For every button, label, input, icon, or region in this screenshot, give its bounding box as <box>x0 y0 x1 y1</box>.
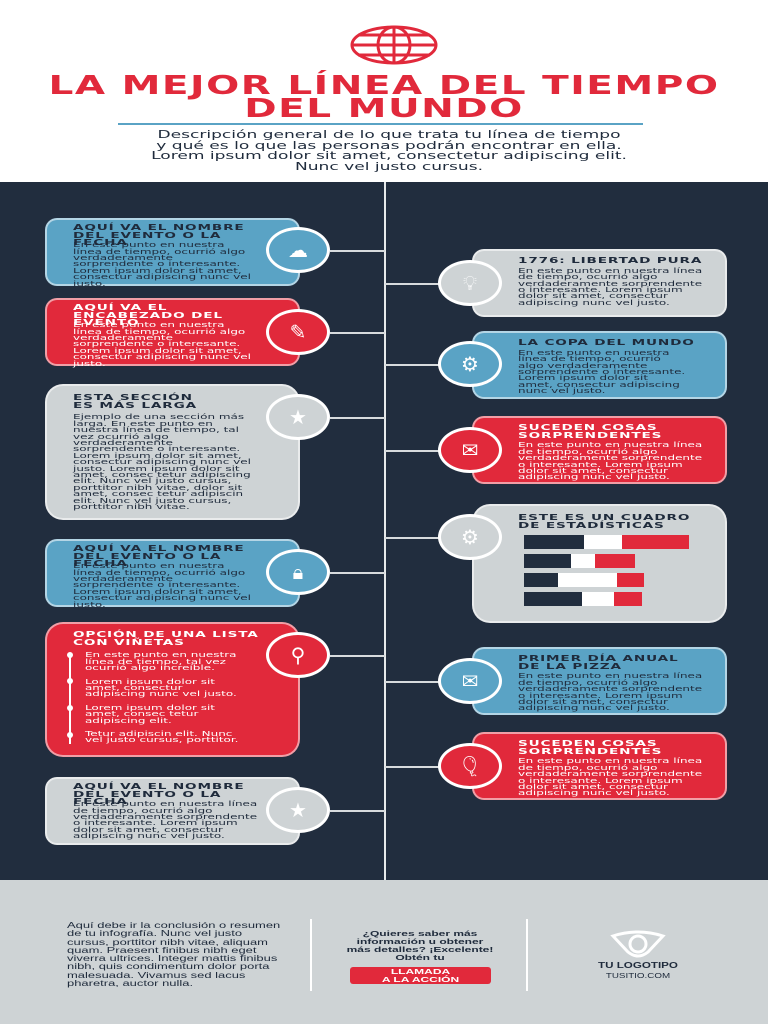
event left 3: verdaderamente <box>73 439 173 447</box>
event left 5: list: Lorem ipsum dolor sit <box>85 704 215 712</box>
event right 1: dolor sit amet, consectur <box>518 292 668 300</box>
event left 3: Lorem ipsum dolor sit amet, <box>73 452 242 460</box>
event left 6: En este punto en nuestra línea <box>73 800 257 808</box>
event left 5: list: CON VIÑETAS <box>73 638 185 647</box>
event left 5: list: adipiscing nunc vel justo. <box>85 690 237 698</box>
event left 4: FECHA <box>73 559 128 568</box>
event left 5: list: En este punto en nuestra <box>85 651 236 659</box>
event right 3: En este punto en nuestra línea <box>518 441 702 449</box>
title <box>48 70 719 124</box>
event left 1: DEL EVENTO O LA <box>73 231 221 240</box>
event right 1: verdaderamente sorprendente <box>518 280 702 288</box>
event left 3: elit. Nunc vel justo cursus, <box>73 477 231 485</box>
event left 3 <box>45 384 300 520</box>
icon: mail 2 <box>438 658 502 704</box>
conclusion text: nibh, quis condimentum dolor porta <box>67 962 269 971</box>
icon: gear: ⚙ <box>461 352 479 376</box>
event left 5: list: adipiscing elit. <box>85 717 172 725</box>
event right 3: SUCEDEN COSAS <box>518 423 658 432</box>
event left 2 <box>45 298 300 366</box>
event right 5: adipiscing nunc vel justo. <box>518 704 670 712</box>
event left 3: vez ocurrió algo <box>73 433 169 441</box>
event left 6: verdaderamente sorprendente <box>73 813 257 821</box>
conclusion text: viverra ultrices. Integer mattis finibus <box>67 954 277 963</box>
event left 1: Lorem ipsum dolor sit amet, <box>73 267 242 275</box>
event left 2: Lorem ipsum dolor sit amet, <box>73 347 242 355</box>
event right 6: adipiscing nunc vel justo. <box>518 789 670 797</box>
event left 3: consectur adipiscing nunc vel <box>73 458 251 466</box>
event right 2: En este punto en nuestra <box>518 349 669 357</box>
event left 2: ENCABEZADO DEL <box>73 311 223 320</box>
panel: timeline <box>0 182 768 880</box>
icon: balloon: 🎈︎ <box>457 754 483 778</box>
event right 2: línea de tiempo, ocurrió <box>518 355 661 363</box>
description: Descripción general de lo que trata tu línea de tiempo <box>157 128 621 141</box>
icon: star <box>266 394 330 440</box>
icon: balloon <box>438 743 502 789</box>
event left 1: consectur adipiscing nunc vel <box>73 273 251 281</box>
event left 1 <box>45 218 300 286</box>
call to action <box>347 929 493 984</box>
event right 5: PRIMER DÍA ANUAL <box>518 654 678 663</box>
conclusion text: malesuada. Vivamus sed lacus <box>67 971 245 980</box>
event right 1: adipiscing nunc vel justo. <box>518 299 670 307</box>
event left 5: list: amet, consec tetur <box>85 710 198 718</box>
event right 3: o interesante. Lorem ipsum <box>518 461 683 469</box>
event left 3: sorprendente o interesante. <box>73 445 240 453</box>
event right 5: verdaderamente sorprendente <box>518 685 702 693</box>
event right 5 <box>472 647 727 715</box>
conclusion text: de tu infografía. Nunc vel justo <box>67 929 242 938</box>
event left 6: DEL EVENTO O LA <box>73 790 221 799</box>
icon: bulb <box>438 260 502 306</box>
event left 4: AQUÍ VA EL NOMBRE <box>73 544 245 553</box>
event left 1: sorprendente o interesante. <box>73 260 240 268</box>
conclusion text <box>67 921 280 988</box>
event left 5: list: OPCIÓN DE UNA LISTA <box>73 630 259 639</box>
event right 6: de tiempo, ocurrió algo <box>518 764 658 772</box>
icon: dropper <box>266 309 330 355</box>
conclusion text: cursus, porttitor nibh vitae, aliquam <box>67 938 268 947</box>
title: DEL MUNDO <box>244 94 524 124</box>
logo: TU LOGOTIPO <box>598 961 678 970</box>
event left 2: verdaderamente <box>73 334 173 342</box>
event left 4: verdaderamente <box>73 575 173 583</box>
icon: pin: ⚲ <box>291 643 305 667</box>
icon: pin <box>266 632 330 678</box>
event left 5: list: Tetur adipiscin elit. Nunc <box>85 730 232 738</box>
event right 5: En este punto en nuestra línea <box>518 672 702 680</box>
icon: bag <box>266 549 330 595</box>
event left 4: En este punto en nuestra <box>73 562 224 570</box>
icon: globe <box>350 26 438 64</box>
event right 3: SORPRENDENTES <box>518 431 662 440</box>
event left 2: En este punto en nuestra <box>73 321 224 329</box>
event right 2: amet, consectur adipiscing <box>518 381 680 389</box>
event left 4: Lorem ipsum dolor sit amet, <box>73 588 242 596</box>
event right 5: o interesante. Lorem ipsum <box>518 692 683 700</box>
logo: TUSITIO.COM <box>606 973 670 980</box>
event right 3: adipiscing nunc vel justo. <box>518 473 670 481</box>
event right 3: dolor sit amet, consectur <box>518 467 668 475</box>
event left 4: línea de tiempo, ocurrió algo <box>73 569 245 577</box>
icon: star 2 <box>266 787 330 833</box>
icon: star 2: ★ <box>289 798 307 822</box>
event left 3: nuestra línea de tiempo, tal <box>73 426 239 434</box>
event left 3: porttitor nibh vitae. <box>73 503 190 511</box>
icon: mail 2: ✉ <box>462 669 478 693</box>
event left 5: list: Lorem ipsum dolor sit <box>85 678 215 686</box>
icon: bulb: 💡︎ <box>463 271 477 295</box>
event left 4 <box>45 539 300 607</box>
button <box>350 967 490 984</box>
event left 1: En este punto en nuestra <box>73 241 224 249</box>
event right 5: de tiempo, ocurrió algo <box>518 679 658 687</box>
event left 3: ES MÁS LARGA <box>73 401 197 410</box>
icon: gear 2: ⚙ <box>461 525 479 549</box>
icon: star: ★ <box>289 405 307 429</box>
event left 4: justo. <box>73 601 106 609</box>
event right 6 <box>472 732 727 800</box>
event left 5: list: línea de tiempo, tal vez <box>85 658 226 666</box>
description: Lorem ipsum dolor sit amet, consectetur adipiscing elit. <box>151 149 627 162</box>
event right 1: o interesante. Lorem ipsum <box>518 286 683 294</box>
event left 4: consectur adipiscing nunc vel <box>73 594 251 602</box>
event left 3: amet, consec tetur adipiscing <box>73 471 251 479</box>
event left 1: justo. <box>73 280 106 288</box>
event right 3 <box>472 416 727 484</box>
call to action: Obtén tu <box>395 953 445 962</box>
event left 6: AQUÍ VA EL NOMBRE <box>73 782 245 791</box>
event right 4: stats chart: DE ESTADÍSTICAS <box>518 521 665 530</box>
logo <box>598 930 678 980</box>
event right 5: DE LA PIZZA <box>518 662 622 671</box>
event left 6: FECHA <box>73 797 128 806</box>
event left 3: elit. Nunc vel justo cursus, <box>73 497 231 505</box>
event left 6: o interesante. Lorem ipsum <box>73 819 238 827</box>
call to action: información u obtener <box>357 937 483 946</box>
conclusion text: pharetra, auctor nulla. <box>67 979 193 988</box>
icon: mail: ✉ <box>462 438 478 462</box>
event right 6: verdaderamente sorprendente <box>518 770 702 778</box>
panel: footer <box>0 880 768 1024</box>
event left 4: DEL EVENTO O LA <box>73 552 221 561</box>
icon: mail <box>438 427 502 473</box>
event left 2: AQUÍ VA EL <box>73 303 167 312</box>
event left 2: consectur adipiscing nunc vel <box>73 353 251 361</box>
description: y qué es lo que las personas podrán encontrar en ella. <box>156 138 622 152</box>
event right 6: o interesante. Lorem ipsum <box>518 777 683 785</box>
event left 6: adipiscing nunc vel justo. <box>73 832 225 840</box>
bar chart <box>524 535 689 606</box>
event right 5: dolor sit amet, consectur <box>518 698 668 706</box>
event right 2: nunc vel justo. <box>518 387 606 395</box>
event right 1: de tiempo, ocurrió algo <box>518 273 658 281</box>
event left 3: larga. En este punto en <box>73 420 213 428</box>
event right 6: SORPRENDENTES <box>518 747 662 756</box>
event right 2: LA COPA DEL MUNDO <box>518 338 695 347</box>
conclusion text: quam. Praesent finibus nibh eget <box>67 946 256 955</box>
event left 4: sorprendente o interesante. <box>73 581 240 589</box>
event left 2: línea de tiempo, ocurrió algo <box>73 328 245 336</box>
icon: dropper: ✎ <box>290 320 306 344</box>
event left 1: AQUÍ VA EL NOMBRE <box>73 223 245 232</box>
event left 5: list <box>45 622 300 757</box>
event right 1: En este punto en nuestra línea <box>518 267 702 275</box>
icon: gear <box>438 341 502 387</box>
description <box>151 128 627 172</box>
event left 1: FECHA <box>73 238 128 247</box>
event left 1: línea de tiempo, ocurrió algo <box>73 248 245 256</box>
event left 3: porttitor nibh vitae, dolor sit <box>73 484 242 492</box>
event right 2 <box>472 331 727 399</box>
icon: gear 2 <box>438 514 502 560</box>
event right 3: verdaderamente sorprendente <box>518 454 702 462</box>
icon: cloud: ☁ <box>288 238 308 262</box>
event right 6: dolor sit amet, consectur <box>518 783 668 791</box>
event left 2: EVENTO <box>73 318 139 327</box>
icon: bag: 🔒︎ <box>293 560 303 584</box>
event left 5: list: vel justo cursus, porttitor. <box>85 736 238 744</box>
call to action: más detalles? ¡Excelente! <box>347 945 493 954</box>
button: A LA ACCIÓN <box>381 974 459 984</box>
event right 4: stats chart: ESTE ES UN CUADRO <box>518 513 690 522</box>
event left 3: justo. Lorem ipsum dolor sit <box>73 465 240 473</box>
event right 6: En este punto en nuestra línea <box>518 757 702 765</box>
event right 3: de tiempo, ocurrió algo <box>518 448 658 456</box>
event right 2: sorprendente o interesante. <box>518 368 685 376</box>
event right 4: stats chart <box>472 504 727 623</box>
event left 5: list: amet, consectur <box>85 684 183 692</box>
event left 1: verdaderamente <box>73 254 173 262</box>
event left 6 <box>45 777 300 845</box>
event left 2: sorprendente o interesante. <box>73 340 240 348</box>
title: LA MEJOR LÍNEA DEL TIEMPO <box>48 71 719 101</box>
event left 3: Ejemplo de una sección más <box>73 413 244 421</box>
call to action: ¿Quieres saber más <box>363 929 477 938</box>
event left 6: de tiempo, ocurrió algo <box>73 807 213 815</box>
icon: cloud <box>266 227 330 273</box>
event left 6: dolor sit amet, consectur <box>73 826 223 834</box>
event left 2: justo. <box>73 360 106 368</box>
description: Nunc vel justo cursus. <box>295 160 483 172</box>
event right 6: SUCEDEN COSAS <box>518 739 658 748</box>
event left 3: ESTA SECCIÓN <box>73 393 193 402</box>
event right 1 <box>472 249 727 317</box>
event right 2: Lorem ipsum dolor sit <box>518 374 648 382</box>
conclusion text: Aquí debe ir la conclusión o resumen <box>67 921 280 930</box>
event right 2: algo verdaderamente <box>518 362 647 370</box>
button: LLAMADA <box>390 967 450 976</box>
event left 5: list: ocurrió algo increíble. <box>85 664 215 672</box>
event right 1: 1776: LIBERTAD PURA <box>518 256 702 265</box>
event left 3: amet, consec tetur adipiscin <box>73 490 243 498</box>
